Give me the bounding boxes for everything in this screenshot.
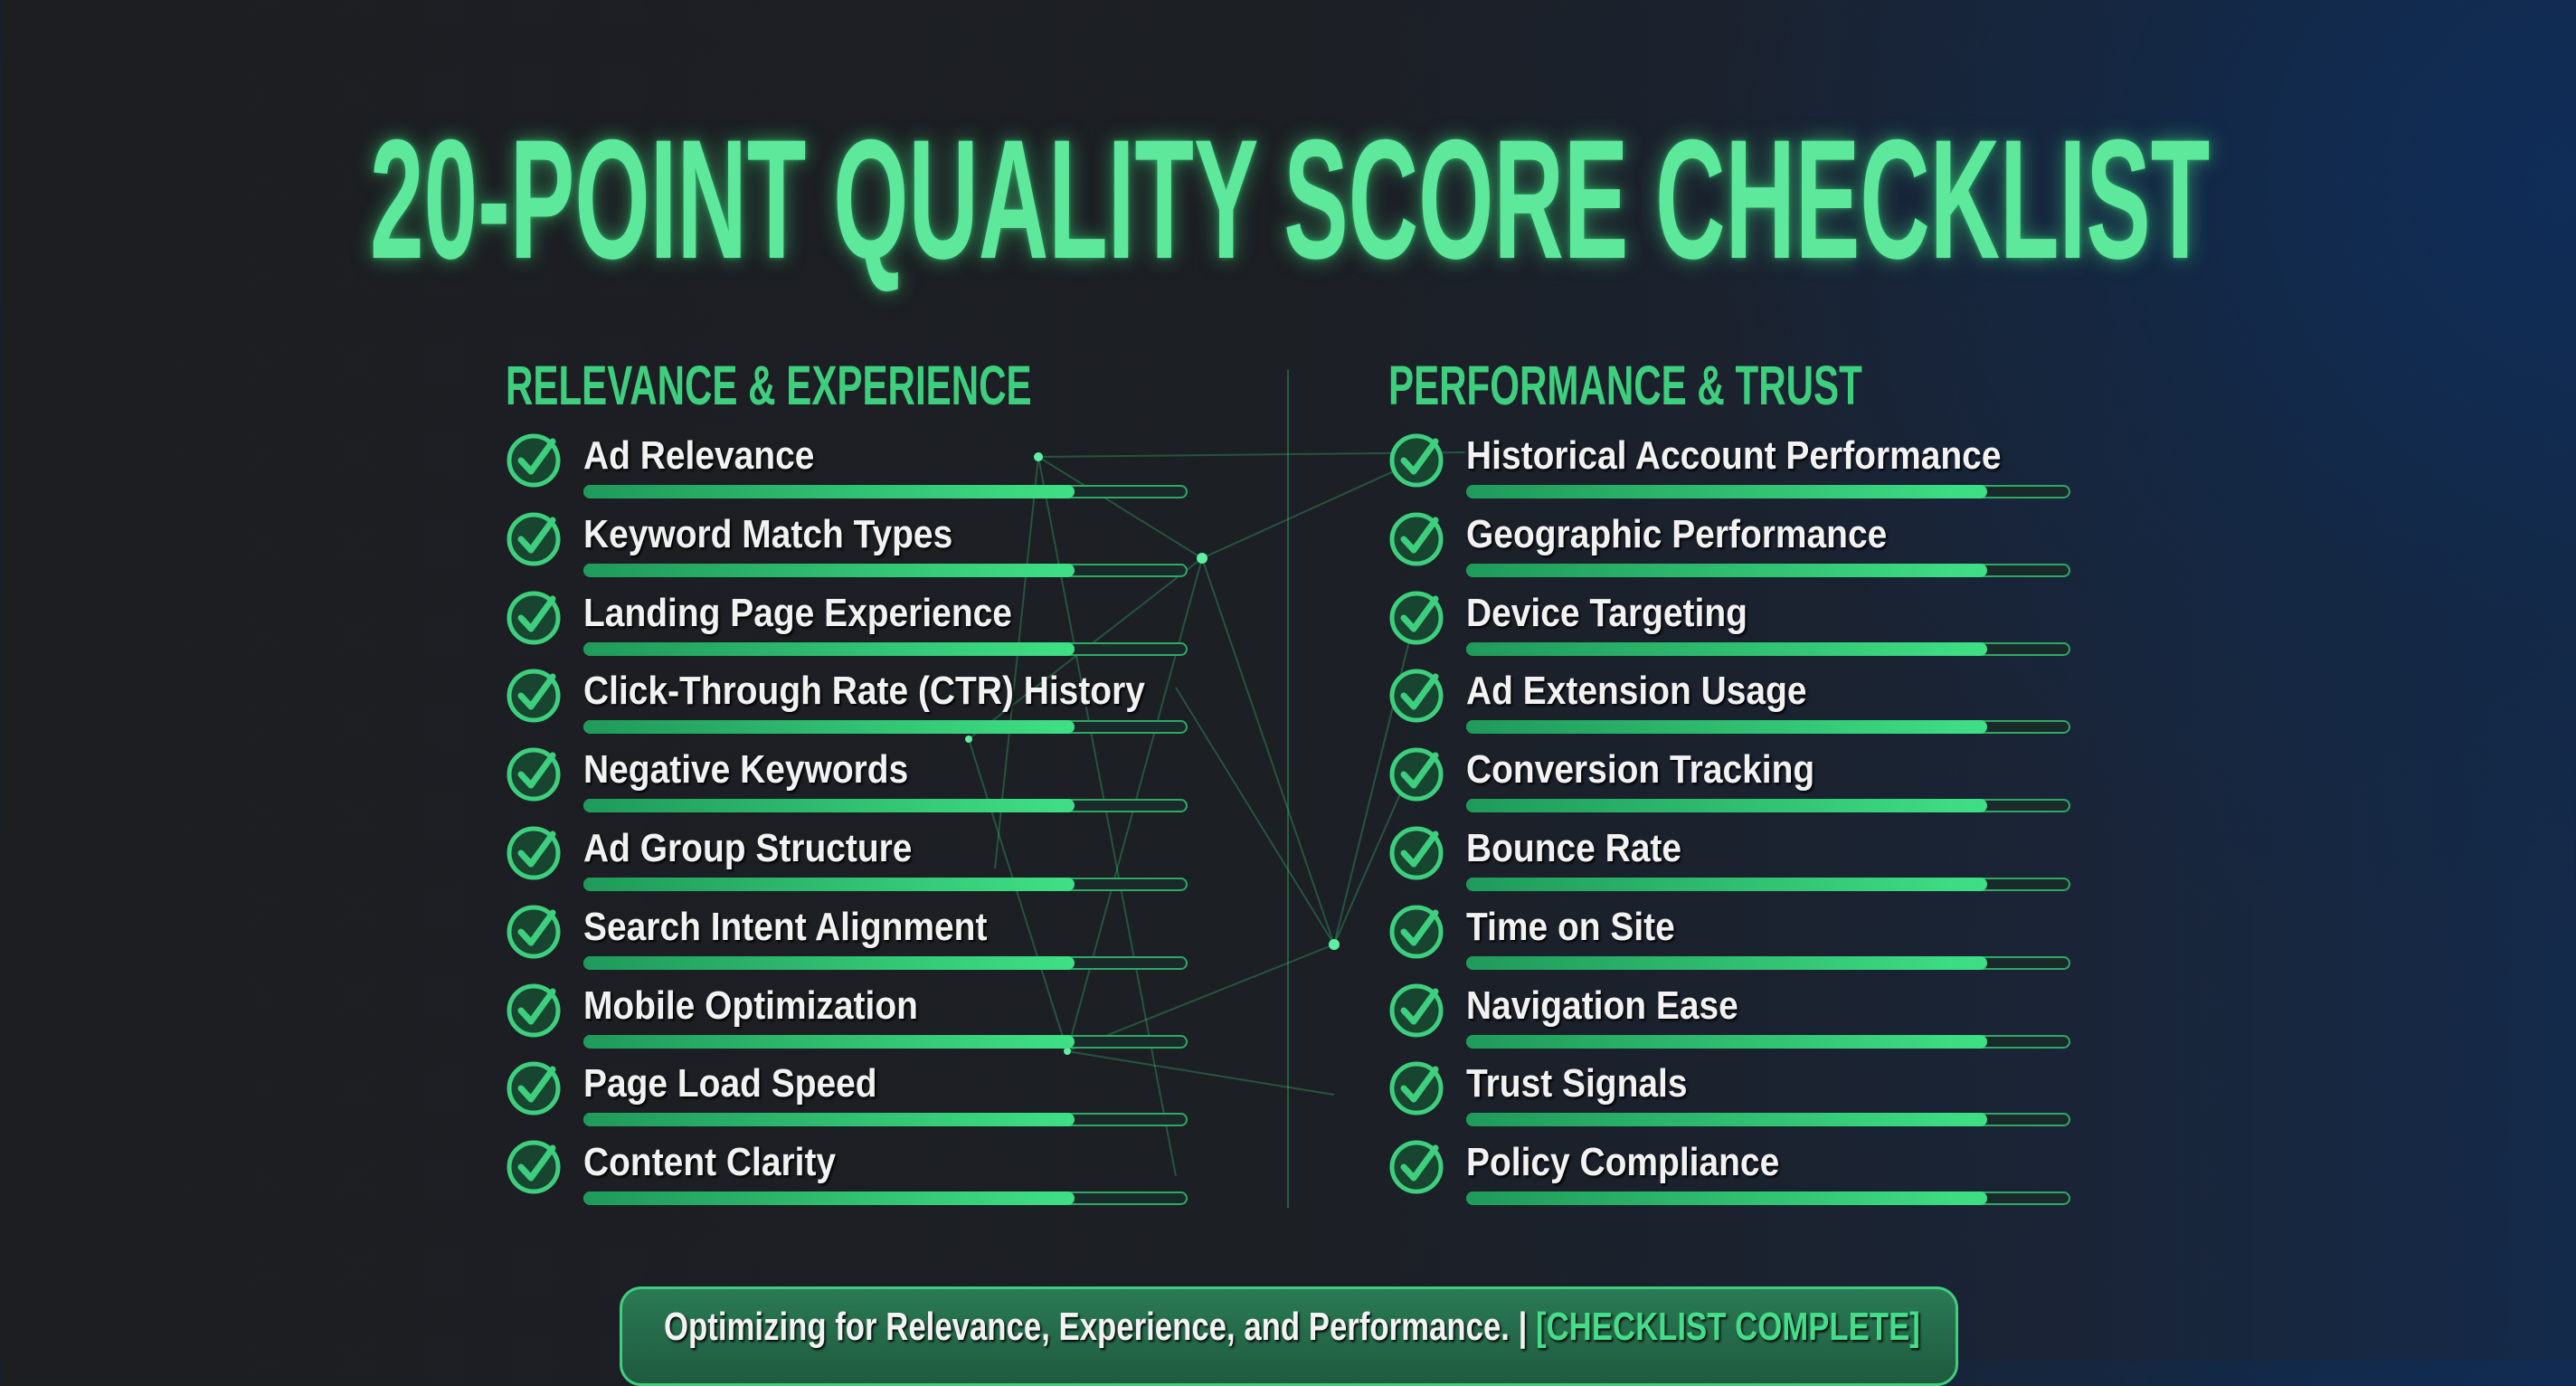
item: Geographic Performance: Geographic Performance bbox=[1466, 512, 1887, 556]
item: Time on Site bbox=[1389, 905, 2070, 970]
item: Ad Group Structure bbox=[507, 826, 1188, 891]
item: Ad Relevance bbox=[507, 433, 1188, 498]
item: Bounce Rate bbox=[1389, 826, 2070, 891]
item: Navigation Ease bbox=[1389, 983, 2070, 1049]
item: Mobile Optimization bbox=[507, 983, 1188, 1049]
heading: performance & trust: PERFORMANCE & TRUST bbox=[1388, 355, 1862, 416]
heading: relevance & experience: RELEVANCE & EXPERIENCE bbox=[506, 355, 1032, 416]
item: Geographic Performance bbox=[1389, 512, 2070, 577]
panel: left checklist bbox=[507, 433, 1188, 1205]
item: Search Intent Alignment: Search Intent Alignment bbox=[583, 905, 987, 949]
item: Content Clarity bbox=[507, 1140, 1188, 1205]
item: Keyword Match Types bbox=[507, 512, 1188, 577]
item: Landing Page Experience bbox=[507, 591, 1188, 656]
item: Ad Extension Usage: Ad Extension Usage bbox=[1466, 669, 1807, 713]
item: CTR History bbox=[507, 669, 1188, 734]
item: Trust Signals bbox=[1389, 1061, 2070, 1126]
item: Conversion Tracking bbox=[1389, 747, 2070, 812]
item: Historical Account Performance: Historical Account Performance bbox=[1466, 433, 2001, 478]
footer banner bbox=[620, 1286, 1958, 1386]
item: Negative Keywords: Negative Keywords bbox=[583, 747, 908, 792]
item: CTR History: Click-Through Rate (CTR) History bbox=[583, 669, 1145, 713]
item: Time on Site: Time on Site bbox=[1466, 905, 1675, 949]
item: Historical Account Performance bbox=[1389, 433, 2070, 498]
item: Trust Signals: Trust Signals bbox=[1466, 1061, 1688, 1106]
item: Search Intent Alignment bbox=[507, 905, 1188, 970]
item: Navigation Ease: Navigation Ease bbox=[1466, 983, 1738, 1028]
item: Landing Page Experience: Landing Page Experience bbox=[583, 591, 1012, 635]
item: Content Clarity: Content Clarity bbox=[583, 1140, 836, 1184]
item: Negative Keywords bbox=[507, 747, 1188, 812]
item: Keyword Match Types: Keyword Match Types bbox=[583, 512, 952, 556]
footer banner: Optimizing for Relevance, Experience, and Performance. | [CHECKLIST COMPLETE] bbox=[664, 1305, 1920, 1349]
item: Page Load Speed: Page Load Speed bbox=[583, 1061, 877, 1106]
item: Device Targeting bbox=[1389, 591, 2070, 656]
item: Mobile Optimization: Mobile Optimization bbox=[583, 983, 918, 1028]
panel: right checklist bbox=[1389, 433, 2070, 1205]
item: Policy Compliance bbox=[1389, 1140, 2070, 1205]
item: Policy Compliance: Policy Compliance bbox=[1466, 1140, 1779, 1184]
item: Ad Relevance: Ad Relevance bbox=[583, 433, 814, 478]
item: Bounce Rate: Bounce Rate bbox=[1466, 826, 1681, 870]
item: Device Targeting: Device Targeting bbox=[1466, 591, 1747, 635]
item: Page Load Speed bbox=[507, 1061, 1188, 1126]
item: Ad Extension Usage bbox=[1389, 669, 2070, 734]
title: 20-POINT QUALITY SCORE CHECKLIST bbox=[370, 104, 2210, 294]
item: Ad Group Structure: Ad Group Structure bbox=[583, 826, 912, 870]
item: Conversion Tracking: Conversion Tracking bbox=[1466, 747, 1814, 792]
